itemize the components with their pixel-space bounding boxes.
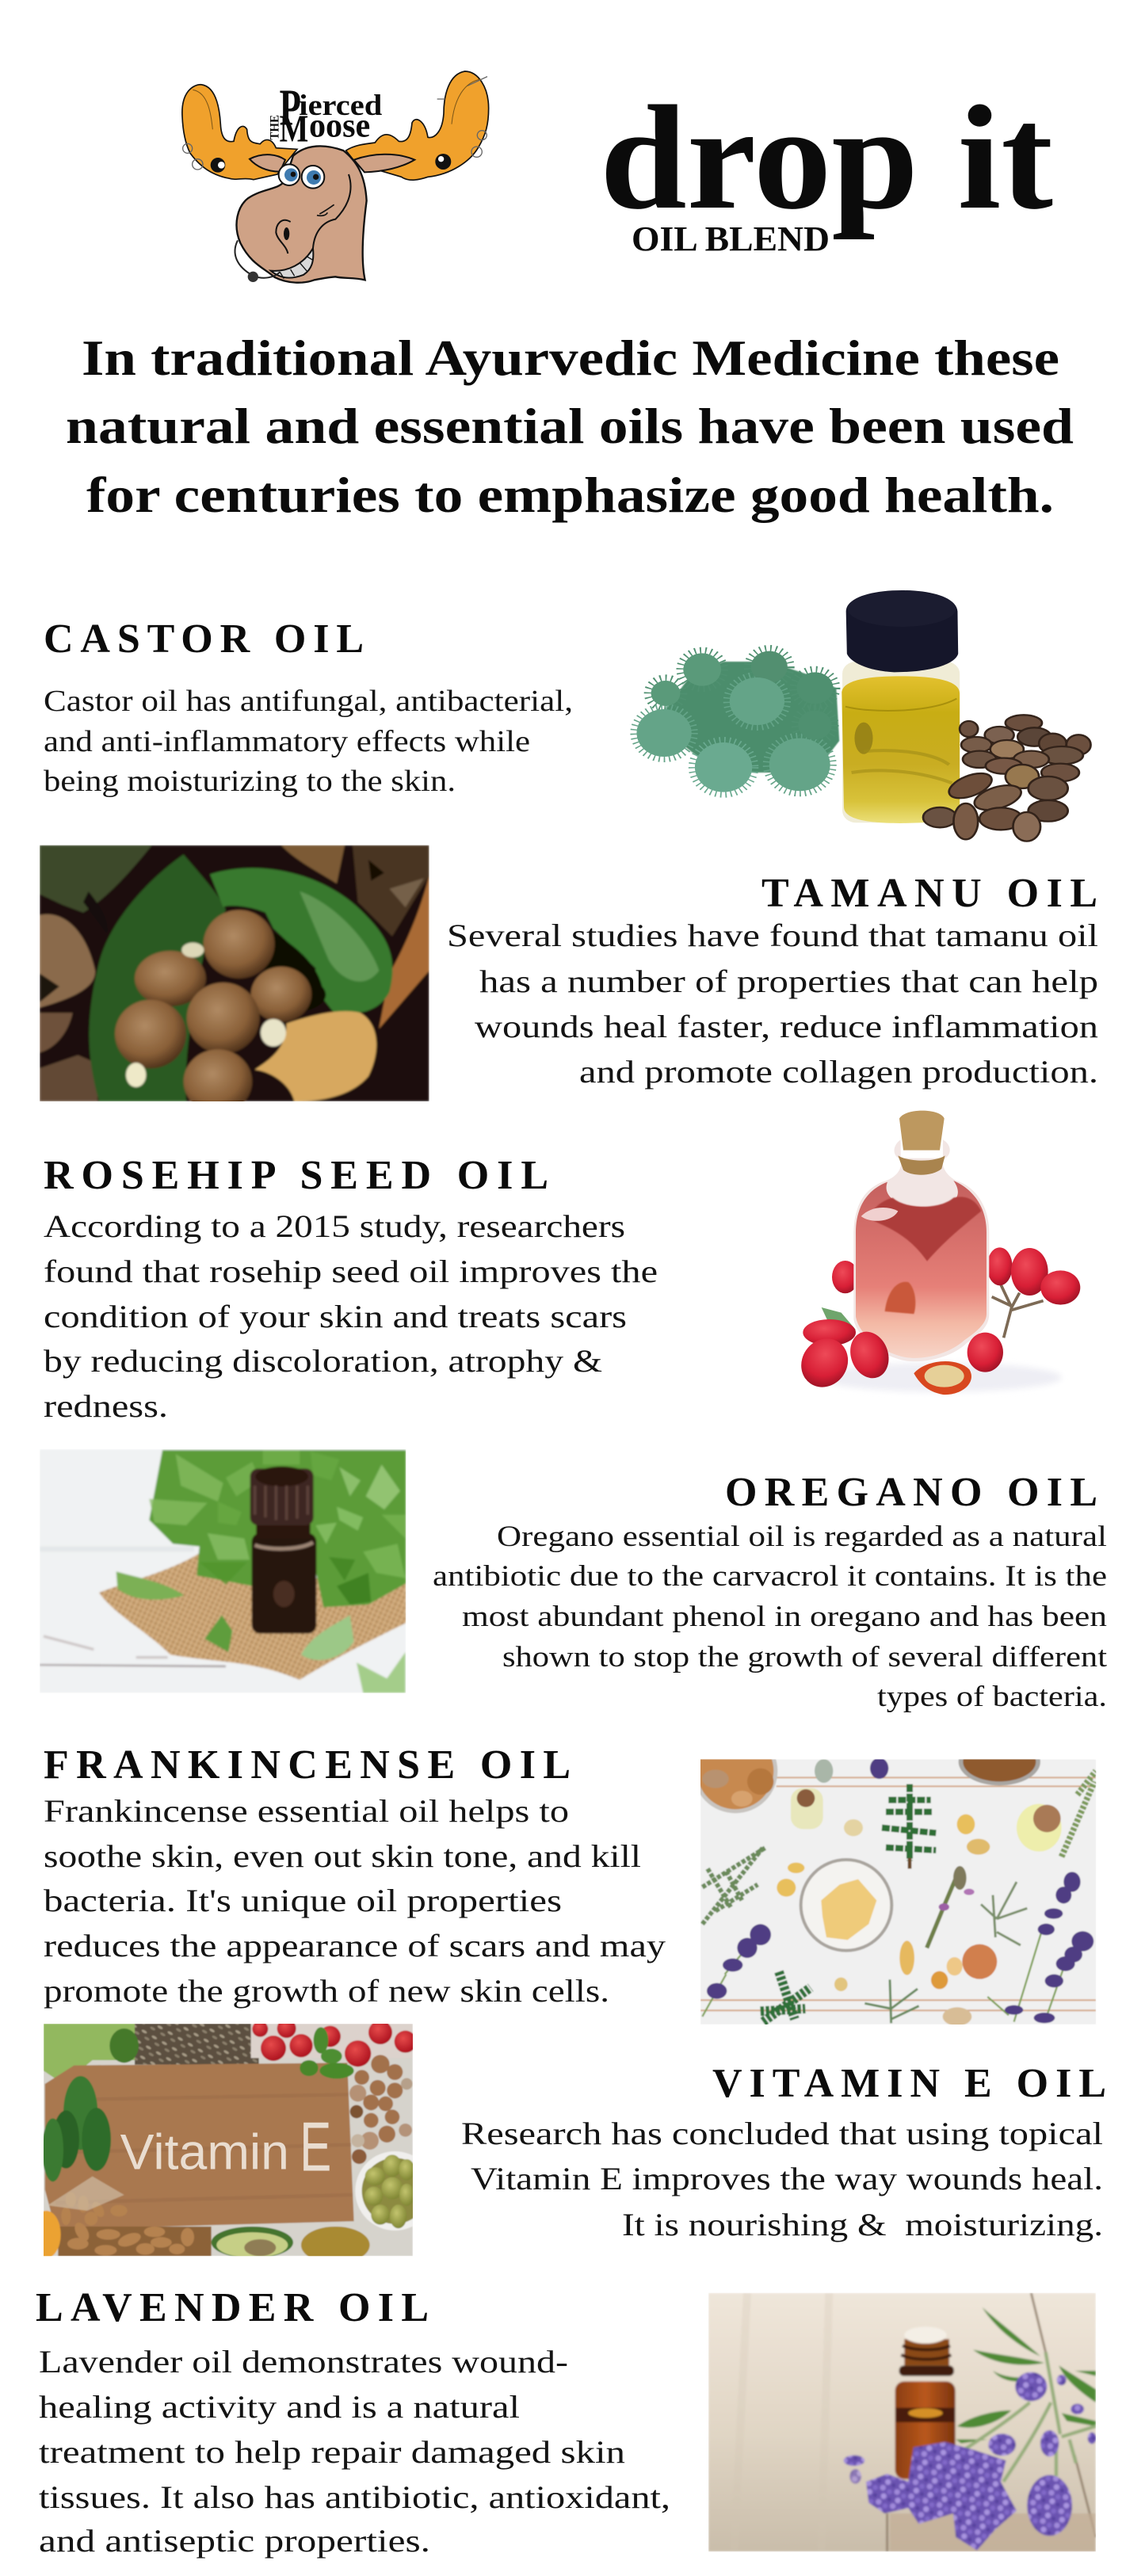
tomatoes [250, 2024, 260, 2059]
body: rosehip seed oil: condition of your skin and treats scars [44, 1299, 627, 1334]
front berries [803, 1319, 856, 1345]
image: oregano leaves and dark bottle [40, 1449, 406, 1693]
orange slice [32, 2211, 61, 2258]
intro text [66, 330, 1074, 523]
body: lavender oil: tissues. It also has antibiotic, antioxidant, [39, 2479, 670, 2515]
image: tamanu nuts on leaves [40, 845, 429, 1114]
lavender sprigs [707, 1757, 1093, 2023]
body: tamanu oil: Several studies have found that tamanu oil [447, 918, 1098, 953]
body: castor oil [44, 685, 573, 798]
lavender blooms [844, 2372, 1096, 2551]
halved berry [914, 1361, 971, 1395]
resin bowls [693, 1729, 777, 1813]
body: rosehip seed oil: According to a 2015 study, researchers [44, 1208, 625, 1244]
resin pieces [777, 1815, 990, 2026]
green herbs [702, 1771, 1096, 2023]
logo wordmark: THE [269, 115, 282, 140]
castor pods [666, 662, 839, 773]
eyes [279, 164, 300, 185]
heading: lavender oil: LAVENDER OIL [36, 2285, 429, 2330]
seeds [135, 2024, 259, 2065]
almonds [58, 2227, 212, 2256]
cork [899, 1111, 945, 1151]
heading: vitamin e oil: VITAMIN E OIL [712, 2061, 1106, 2106]
body: oregano oil: shown to stop the growth of several different [502, 1641, 1108, 1673]
panel: tamanu oil [40, 845, 1098, 1114]
body: lavender oil: healing activity and is a natural [39, 2389, 520, 2425]
logo wordmark: oose [309, 107, 370, 145]
body: lavender oil: treatment to help repair damaged skin [39, 2434, 625, 2470]
body: oregano oil: most abundant phenol in oregano and has been [462, 1601, 1107, 1633]
rose oil [856, 1181, 987, 1358]
image: frankincense resin, herbs and lavender [700, 1759, 1097, 2025]
body: vitamin e oil: Research has concluded that using topical [461, 2116, 1103, 2151]
body: lavender oil: Lavender oil demonstrates wound- [39, 2344, 568, 2379]
bottle [252, 1533, 316, 1634]
body: vitamin e oil: Vitamin E improves the way wounds heal. [471, 2161, 1103, 2196]
logo wordmark: ierced [299, 90, 383, 122]
panel: oregano oil [40, 1449, 1108, 1713]
body: frankincense oil: Frankincense essential oil helps to [44, 1793, 569, 1829]
body: oregano oil: Oregano essential oil is regarded as a natural [497, 1521, 1107, 1553]
body: frankincense oil: bacteria. It's unique oil properties [44, 1883, 562, 1918]
left antler [182, 85, 297, 180]
logo: The Pierced Moose [182, 71, 489, 283]
wooden board [45, 2063, 354, 2229]
avocado [212, 2227, 293, 2258]
body: rosehip seed oil: found that rosehip seed oil improves the [44, 1254, 658, 1289]
heading: oregano oil: OREGANO OIL [725, 1470, 1097, 1515]
glass bottle with oil [842, 662, 960, 822]
back berries and twigs [992, 1282, 1044, 1338]
oil vials [791, 1788, 823, 1829]
title: drop it: drop it [600, 74, 1053, 240]
basil [314, 2027, 328, 2054]
ears [250, 155, 285, 172]
body: frankincense oil: promote the growth of new skin cells. [44, 1973, 609, 2009]
body: frankincense oil [44, 1793, 666, 2009]
image: vitamin E foods and wooden board [44, 2024, 413, 2257]
olive bowl [355, 2150, 413, 2231]
image: lavender sprigs and amber bottle [708, 2293, 1096, 2551]
burlap mat [99, 1551, 406, 1680]
subtitle: oil blend: OIL BLEND [632, 219, 830, 258]
panel: lavender oil [36, 2285, 1096, 2559]
black cap [846, 590, 958, 672]
body: castor oil: Castor oil has antifungal, antibacterial, [44, 685, 573, 718]
yellow leaf [255, 1011, 376, 1101]
chalk lettering [120, 2107, 331, 2185]
intro text: In traditional Ayurvedic Medicine these [82, 330, 1059, 386]
body: oregano oil [433, 1521, 1108, 1713]
body: vitamin e oil [461, 2116, 1103, 2242]
body: rosehip seed oil: redness. [44, 1388, 168, 1424]
body: oregano oil: types of bacteria. [877, 1681, 1107, 1713]
stems [964, 2353, 1096, 2482]
tamanu nuts [135, 951, 206, 1006]
heading: rosehip seed oil: ROSEHIP SEED OIL [44, 1153, 548, 1198]
intro text: natural and essential oils have been used [66, 399, 1074, 454]
body: frankincense oil: reduces the appearance of scars and may [44, 1928, 666, 1963]
panel: rosehip seed oil [44, 1111, 1080, 1424]
panel: vitamin e oil [32, 2019, 1106, 2264]
amber bottle [895, 2381, 956, 2479]
flour dust [48, 2177, 124, 2211]
loose leaves [116, 1571, 184, 1600]
logo wordmark: M [280, 108, 308, 150]
antler piercings [183, 77, 487, 170]
bright green leaf [210, 868, 392, 1013]
body: lavender oil: and antiseptic properties. [39, 2523, 430, 2559]
image: castor plant, oil bottle and seeds [636, 590, 1091, 841]
panel: castor oil [44, 590, 1091, 841]
logo wordmark: P [280, 78, 301, 136]
body: tamanu oil: wounds heal faster, reduce inflammation [475, 1009, 1098, 1044]
body: rosehip seed oil: by reducing discoloration, atrophy & [44, 1343, 602, 1379]
chalk lettering: E [300, 2107, 331, 2185]
body: vitamin e oil: It is nourishing & moisturizing. [622, 2207, 1103, 2242]
intro text: for centuries to emphasize good health. [86, 467, 1054, 523]
broccoli [44, 2024, 135, 2084]
body: tamanu oil: and promote collagen production. [579, 1054, 1098, 1090]
hazelnuts [349, 2055, 413, 2164]
heading: frankincense oil: FRANKINCENSE OIL [44, 1742, 571, 1788]
leaf bunch [149, 1450, 406, 1607]
panel: frankincense oil [44, 1729, 1096, 2026]
body: castor oil: being moisturizing to the skin. [44, 765, 456, 798]
dark green leaf [89, 854, 226, 1101]
glass bottle [853, 1139, 989, 1361]
castor seeds [923, 715, 1091, 841]
muzzle lines, smile and teeth [313, 174, 351, 248]
heading: tamanu oil: TAMANU OIL [761, 871, 1097, 916]
image: rosehip oil bottle and berries [792, 1111, 1080, 1396]
body: tamanu oil: has a number of properties that can help [479, 964, 1098, 999]
body: tamanu oil [447, 918, 1098, 1090]
body: frankincense oil: soothe skin, even out skin tone, and kill [44, 1838, 641, 1874]
logo wordmark [269, 78, 383, 150]
body: rosehip seed oil [44, 1208, 658, 1424]
flowers [126, 1063, 146, 1087]
body: lavender oil [39, 2344, 670, 2559]
heading: castor oil: CASTOR OIL [44, 616, 364, 662]
lavender leaves [956, 2307, 1096, 2444]
body: oregano oil: antibiotic due to the carvacrol it contains. It is the [433, 1560, 1107, 1593]
spinach [63, 2076, 97, 2150]
chalk lettering: Vitamin [120, 2124, 289, 2180]
head [237, 146, 367, 283]
oil bowl [301, 2227, 370, 2264]
right antler [346, 71, 489, 180]
body: castor oil: and anti-inflammatory effects while [44, 725, 530, 758]
